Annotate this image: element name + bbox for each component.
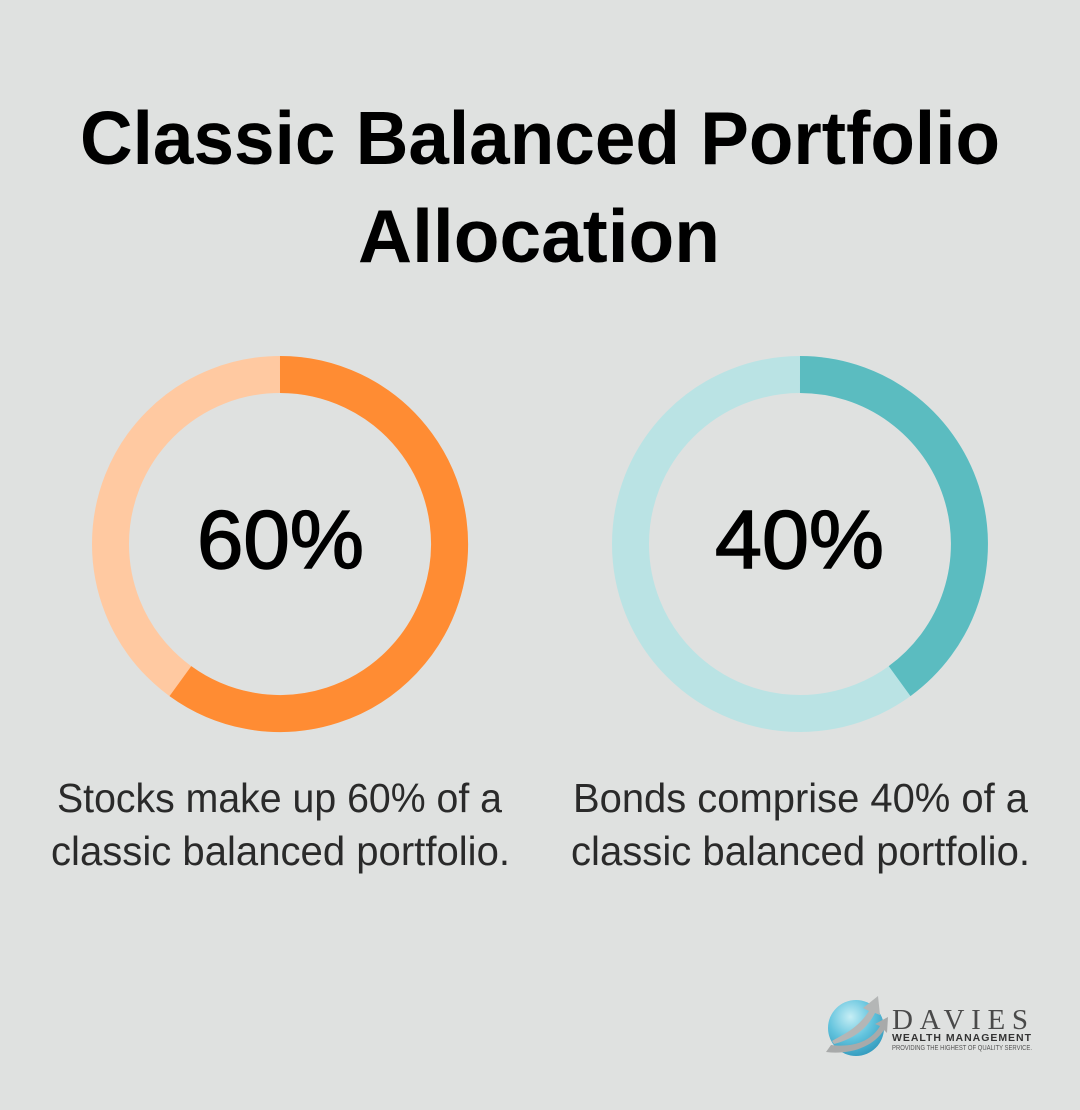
donut chart: stocks 60% [110,374,450,714]
panel: bonds [571,374,1030,874]
description: bonds: Bonds comprise 40% of a [573,775,1028,821]
donut chart: bonds 40% [630,374,970,714]
description: stocks: classic balanced portfolio. [51,828,510,874]
value: 60%: 60% [197,493,364,586]
value: 40%: 40% [715,493,884,586]
title: Classic Balanced Portfolio [80,96,1000,180]
icon: globe with arrows [826,996,888,1056]
description: bonds [571,775,1030,874]
title: Allocation [358,194,720,278]
tagline: PROVIDING THE HIGHEST OF QUALITY SERVICE. [892,1043,1032,1052]
panel: stocks [51,374,510,874]
company line: WEALTH MANAGEMENT [892,1032,1032,1044]
description: bonds: classic balanced portfolio. [571,828,1030,874]
description: stocks [51,775,510,874]
logo: Davies Wealth Management [826,996,1032,1056]
description: stocks: Stocks make up 60% of a [57,775,502,821]
title [80,96,1000,278]
wordmark: DAVIES [892,1004,1028,1036]
